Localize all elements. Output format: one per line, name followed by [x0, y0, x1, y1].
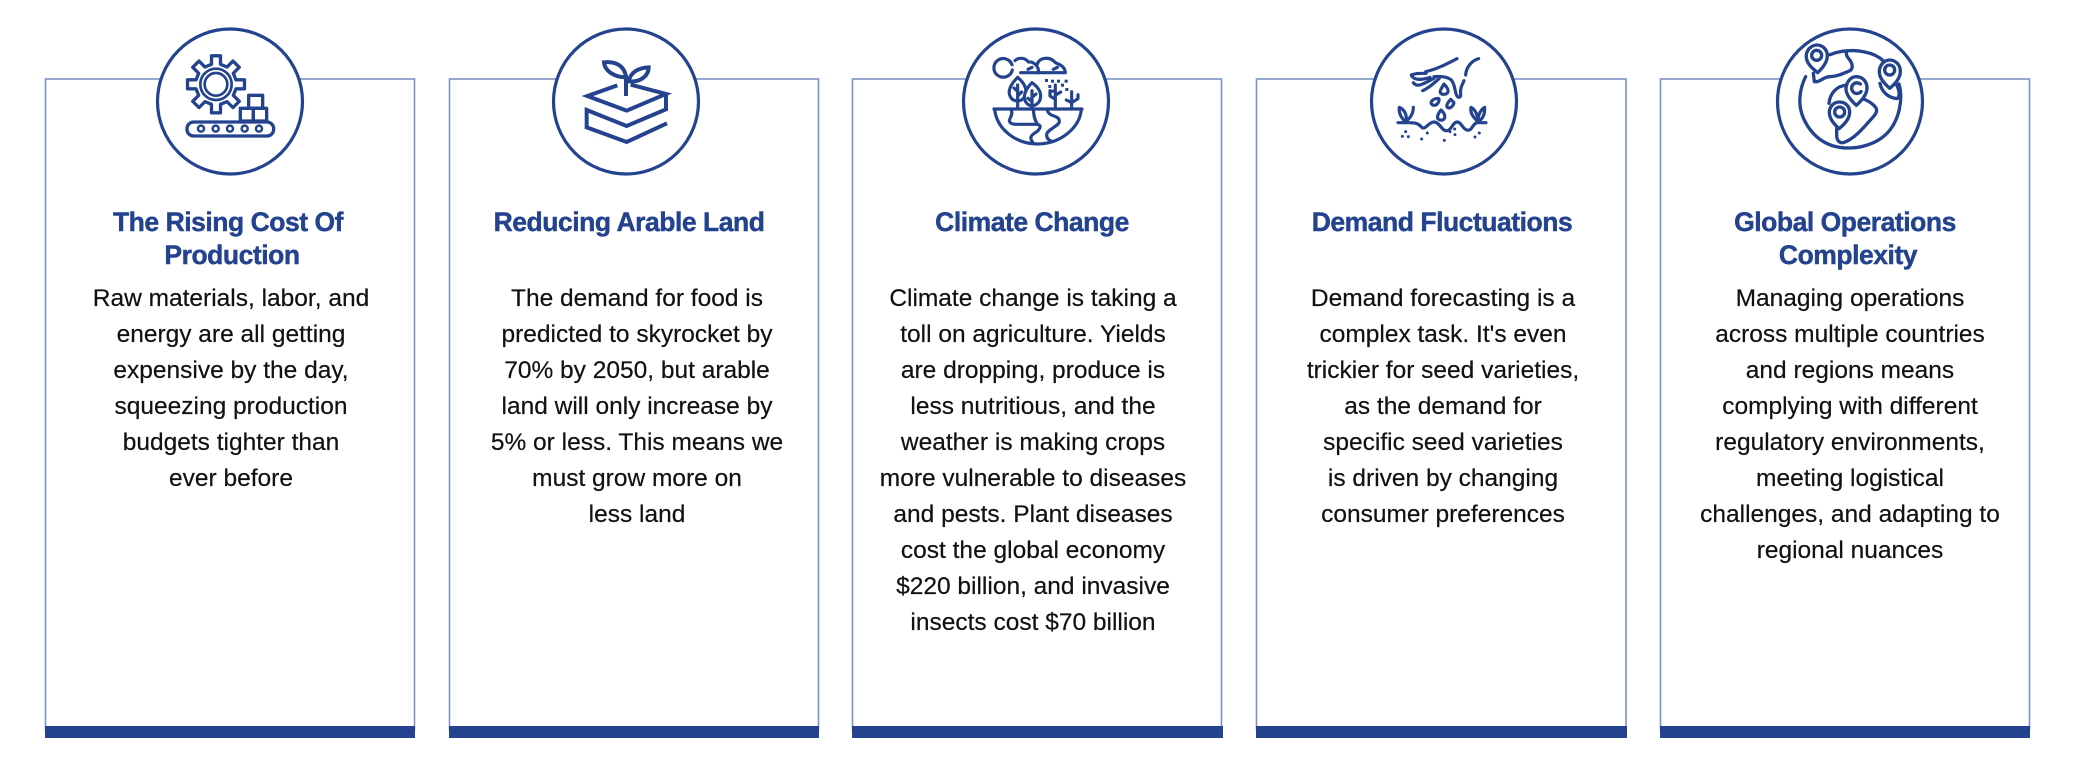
body text: specific seed varieties [1323, 429, 1563, 456]
body text: as the demand for [1344, 393, 1542, 420]
body text: cost the global economy [901, 537, 1166, 564]
body text: expensive by the day, [113, 357, 349, 384]
body text: regional nuances [1757, 537, 1943, 564]
panel frame [852, 79, 1222, 729]
body text: Raw materials, labor, and [93, 285, 369, 312]
heading: Climate Change [935, 207, 1129, 237]
body text: complex task. It's even [1319, 321, 1567, 348]
body text: insects cost $70 billion [910, 609, 1156, 636]
body text: regulatory environments, [1715, 429, 1985, 456]
body text: must grow more on [532, 465, 742, 492]
panel: demand fluctuations [1256, 29, 1627, 738]
body text: and regions means [1746, 357, 1954, 384]
body text: across multiple countries [1715, 321, 1985, 348]
body text: weather is making crops [900, 429, 1165, 456]
body text: less nutritious, and the [910, 393, 1156, 420]
panel base bar [449, 726, 819, 738]
body text: 70% by 2050, but arable [504, 357, 770, 384]
body text: is driven by changing [1328, 465, 1558, 492]
heading: Reducing Arable Land [494, 207, 764, 237]
panel: the rising cost of production [45, 29, 415, 738]
panel: climate change [852, 29, 1223, 738]
body text: and pests. Plant diseases [893, 501, 1173, 528]
body text [1700, 285, 2000, 564]
panel base bar [45, 726, 415, 738]
body text: Demand forecasting is a [1311, 285, 1575, 312]
heading: Demand Fluctuations [1312, 207, 1572, 237]
panel base bar [852, 726, 1223, 738]
panel base bar [1256, 726, 1627, 738]
icon: seedling on soil layers [554, 29, 698, 174]
body text: budgets tighter than [123, 429, 339, 456]
heading: Complexity [1779, 240, 1918, 270]
heading: The Rising Cost Of [113, 207, 344, 237]
panel frame [450, 79, 818, 729]
heading: Production [164, 240, 300, 270]
heading: Global Operations [1734, 207, 1956, 237]
panel base bar [1660, 726, 2030, 738]
panel: reducing arable land [449, 29, 819, 738]
heading [1734, 207, 1956, 270]
body text: less land [589, 501, 685, 528]
body text: are dropping, produce is [901, 357, 1165, 384]
body text: $220 billion, and invasive [896, 573, 1170, 600]
body text: The demand for food is [511, 285, 763, 312]
body text: complying with different [1722, 393, 1978, 420]
body text: challenges, and adapting to [1700, 501, 2000, 528]
body text [93, 285, 369, 492]
icon: globe with location pins [1778, 29, 1922, 174]
icon: hand sowing seeds [1372, 29, 1516, 174]
body text: 5% or less. This means we [491, 429, 783, 456]
panel: global operations complexity [1660, 29, 2030, 738]
panel frame [1256, 79, 1626, 729]
body text: Managing operations [1736, 285, 1964, 312]
icon: gear and conveyor belt [158, 29, 302, 174]
body text: meeting logistical [1756, 465, 1944, 492]
body text: squeezing production [115, 393, 347, 420]
body text: trickier for seed varieties, [1307, 357, 1579, 384]
body text [1307, 285, 1579, 528]
panel frame [1660, 79, 2030, 729]
body text: Climate change is taking a [889, 285, 1177, 312]
body text [491, 285, 783, 528]
body text: more vulnerable to diseases [880, 465, 1186, 492]
body text: ever before [169, 465, 293, 492]
body text [880, 285, 1186, 636]
body text: land will only increase by [502, 393, 773, 420]
panel frame [46, 79, 414, 729]
icon: climate landscape [964, 29, 1108, 174]
heading [113, 207, 344, 270]
body text: toll on agriculture. Yields [900, 321, 1166, 348]
body text: energy are all getting [117, 321, 345, 348]
body text: predicted to skyrocket by [502, 321, 773, 348]
body text: consumer preferences [1321, 501, 1565, 528]
